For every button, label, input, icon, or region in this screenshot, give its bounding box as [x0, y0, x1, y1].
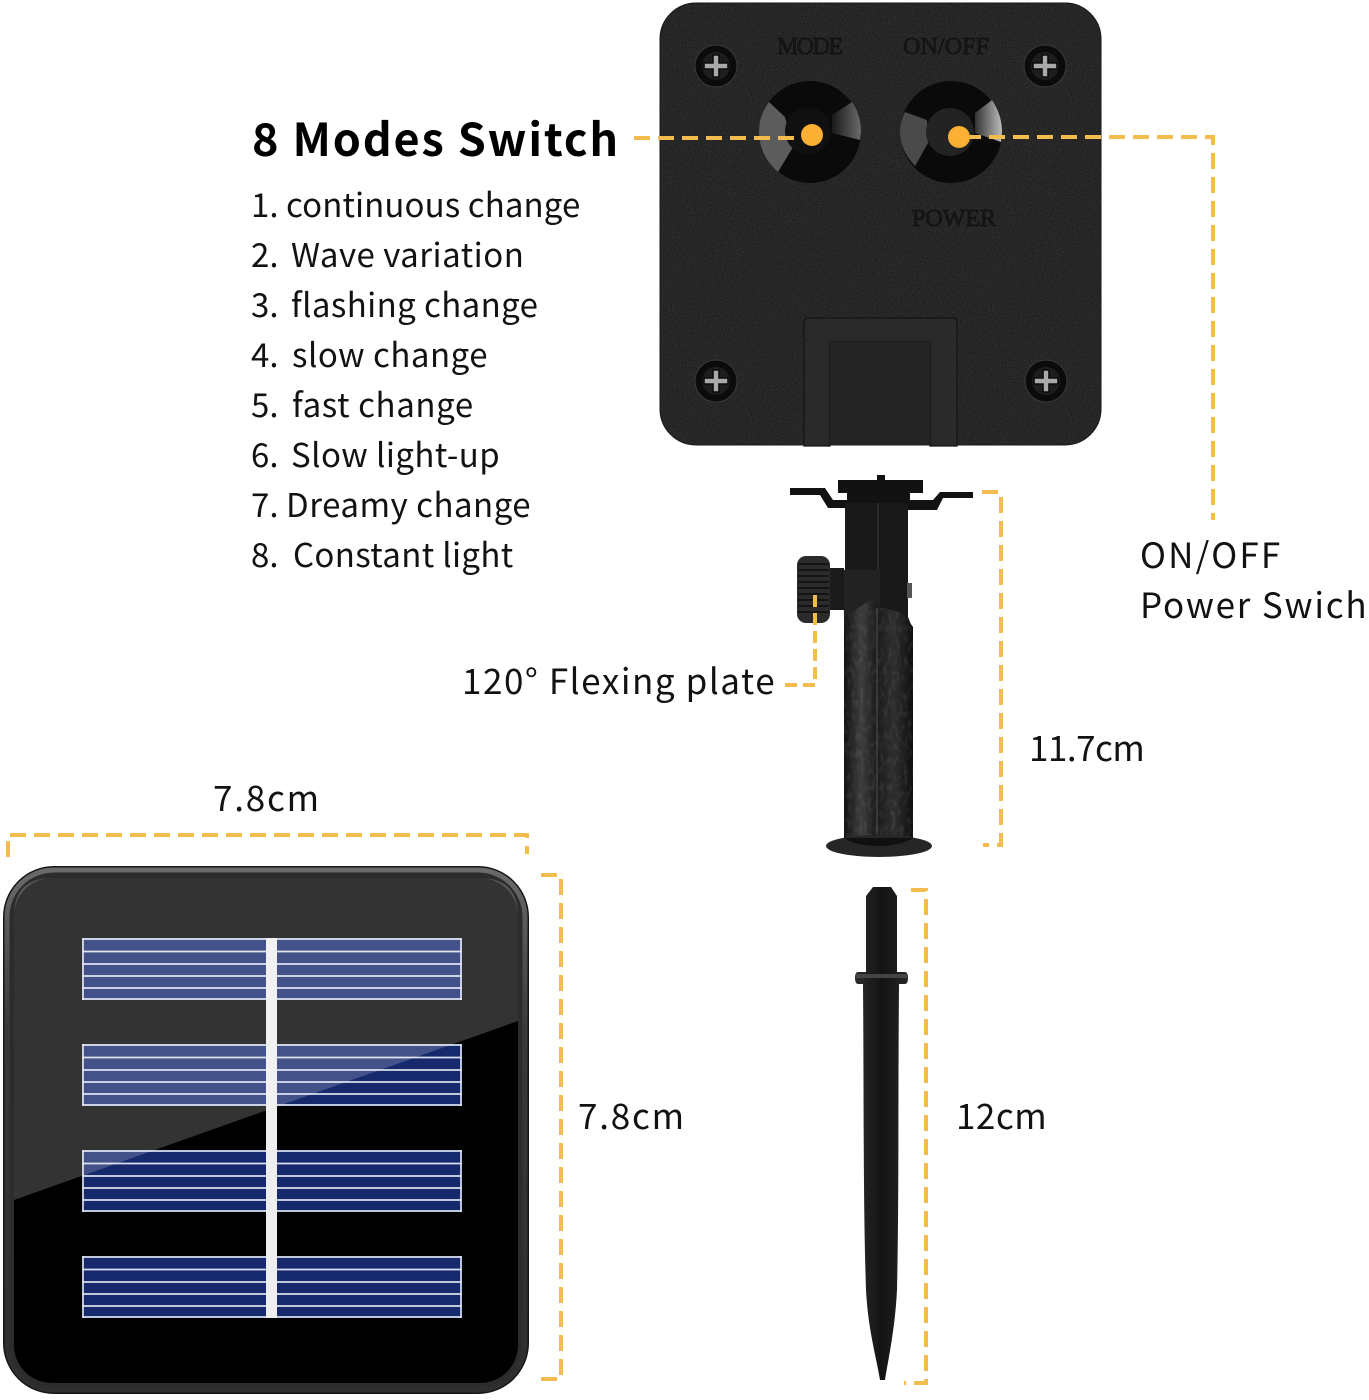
screw: top left: [695, 45, 737, 87]
embossed label: POWER: POWER: [912, 206, 996, 232]
screw: bottom right: [1025, 360, 1067, 402]
callout arrow: power switch: [948, 126, 1213, 520]
solar cell row 2: [82, 1044, 462, 1106]
mode list: [251, 179, 580, 577]
power button: [900, 81, 1002, 183]
solar cell row 4: [82, 1256, 462, 1318]
mode 5: 5.: [251, 379, 278, 427]
label: 120° Flexing plate: 120° Flexing plate: [462, 654, 776, 705]
leader: flexing plate: [785, 590, 815, 685]
mode button: [759, 81, 861, 183]
label: ON/OFF Power Swich: ON/OFF: [1140, 528, 1282, 579]
mode 3: flashing change: [291, 279, 538, 327]
mode 6: 6.: [251, 429, 278, 477]
mode 4: 4.: [251, 329, 278, 377]
dimension bracket: stake height: [904, 890, 926, 1383]
ground stake: [855, 887, 908, 1380]
mode 6: Slow light-up: [291, 429, 500, 477]
upright plate: [845, 503, 912, 627]
embossed label: MODE: MODE: [777, 34, 843, 60]
panel frame: [4, 867, 528, 1393]
mode 1: continuous change: [286, 179, 580, 227]
label: ON/OFF Power Swich: [1140, 528, 1368, 629]
screw: bottom left: [695, 360, 737, 402]
mode 7: Dreamy change: [286, 479, 531, 527]
dimension bracket: panel width: [8, 835, 527, 857]
solar cell row 3: [82, 1150, 462, 1212]
mode 5: fast change: [292, 379, 474, 427]
mode 2: 2.: [251, 229, 278, 277]
callout arrow: mode button: [634, 124, 823, 146]
mode 7: 7.: [251, 479, 278, 527]
heading: 8 Modes Switch: 8 Modes Switch: [252, 104, 620, 169]
dimension: panel width 7.8cm: 7.8cm: [213, 771, 321, 822]
dimension bracket: panel height: [538, 875, 561, 1379]
centre busbar: [266, 938, 277, 1318]
mount bracket with pole: [790, 475, 973, 857]
screw: top right: [1024, 45, 1066, 87]
embossed label: ON/OFF: ON/OFF: [903, 34, 989, 60]
dimension: 12cm: 12cm: [956, 1089, 1047, 1140]
top flange: [790, 475, 973, 516]
dimension: panel height 7.8cm: 7.8cm: [578, 1089, 686, 1140]
pole: [844, 600, 913, 838]
solar cell row 1: [82, 938, 462, 1000]
label: ON/OFF Power Swich: Power Swich: [1140, 578, 1368, 629]
mode 8: Constant light: [293, 529, 514, 577]
dimension: 11.7cm: 11.7cm: [1029, 721, 1144, 772]
pivot joint: [843, 570, 880, 618]
dimension bracket: bracket height: [982, 492, 1001, 845]
base disc: [826, 835, 932, 857]
mode 4: slow change: [292, 329, 488, 377]
glass reflection: [14, 878, 518, 1200]
mode 8: 8.: [251, 529, 278, 577]
rear screw: [907, 583, 912, 598]
controller box back plate: [660, 3, 1101, 446]
adjusting knob: [797, 556, 844, 623]
mode 1: 1.: [251, 179, 278, 227]
mode 2: Wave variation: [291, 229, 524, 277]
mounting slot: [804, 318, 957, 446]
mode 3: 3.: [251, 279, 278, 327]
solar panel: [4, 867, 528, 1393]
